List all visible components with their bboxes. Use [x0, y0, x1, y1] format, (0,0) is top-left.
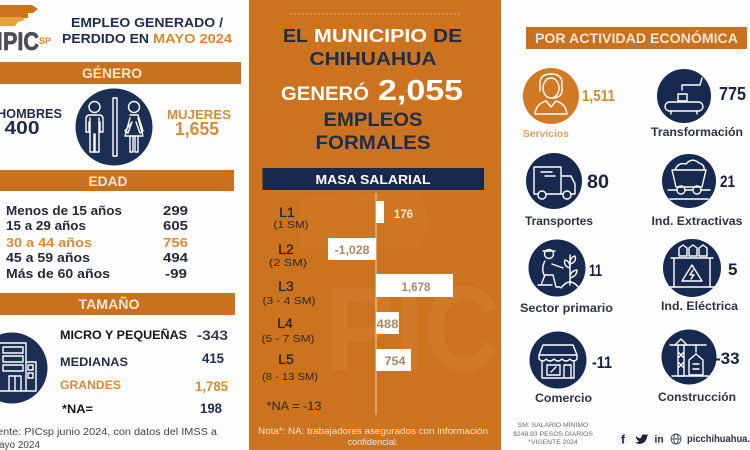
title: EMPLEO GENERADO / [71, 15, 223, 30]
heading: género: GÉNERO [82, 66, 142, 81]
bar L1 [274, 201, 413, 231]
bar L5 [262, 349, 411, 383]
panel: left summary [0, 5, 241, 450]
headline: EMPLEOS [324, 110, 422, 131]
activity: transformación: 775 [719, 84, 746, 104]
table: edad: 15 a 29 años [6, 218, 86, 233]
bar L4: 488 [376, 317, 399, 331]
heading: masa salarial [262, 168, 484, 190]
bar L4: (5 - 7 SM) [262, 333, 314, 345]
table: edad: -99 [165, 266, 187, 281]
heading: tamaño: TAMAÑO [78, 297, 140, 312]
logo [0, 5, 51, 56]
activity: ind. extractivas: Ind. Extractivas [652, 214, 743, 228]
source note [0, 427, 217, 450]
watermark logo [300, 192, 500, 396]
heading: por actividad económica: POR ACTIVIDAD ECONÓMICA [535, 31, 738, 46]
bar L3: 1,678 [402, 280, 431, 294]
headline: 2,055 [378, 75, 463, 107]
activity: servicios: 1,511 [582, 88, 615, 105]
table: tamaño: -343 [197, 327, 228, 343]
table: edad: 756 [163, 235, 188, 250]
source note: ente: PICsp junio 2024, con datos del IMSS a [0, 427, 217, 438]
bar L5: L5 [278, 351, 294, 367]
heading: masa salarial: MASA SALARIAL [316, 172, 431, 187]
title [62, 15, 233, 46]
heading: género [0, 62, 241, 84]
activity: sector primario: Sector primario [520, 301, 613, 315]
title: PERDIDO EN [62, 31, 149, 46]
activity: transformación: Transformación [651, 125, 743, 139]
table: tamaño: GRANDES [60, 378, 121, 392]
activity: ind. extractivas [652, 154, 743, 228]
activity: comercio: Comercio [535, 391, 592, 405]
bar L2 [269, 238, 376, 269]
activity: comercio [530, 332, 612, 405]
table: edad: 605 [163, 218, 188, 233]
social links [616, 432, 750, 446]
mujeres stat: MUJERES [167, 108, 231, 122]
watermark logo: PIC [325, 262, 500, 396]
bar L5: (8 - 13 SM) [262, 371, 318, 383]
table: edad: Menos de 15 años [6, 203, 122, 218]
activity: ind. eléctrica: Ind. Eléctrica [661, 299, 738, 313]
table: edad: 30 a 44 años [6, 235, 92, 250]
activity: construcción: Construcción [658, 390, 736, 404]
activity: sector primario: 11 [589, 261, 602, 280]
headline: MUNICIPIO [314, 25, 427, 46]
minimum wage note: *VIGENTE 2024 [528, 439, 578, 446]
bar L1: (1 SM) [274, 219, 308, 231]
bar L1: L1 [279, 204, 295, 220]
table: tamaño: *NA= [62, 402, 93, 416]
table: tamaño: 1,785 [195, 378, 228, 394]
table: edad: 299 [163, 203, 188, 218]
activity: construcción: -33 [715, 349, 740, 368]
headline: FORMALES [316, 133, 430, 154]
bar L5: 754 [384, 354, 406, 368]
bar L2: -1,028 [334, 243, 370, 257]
hombres stat [0, 107, 62, 138]
bar L4: L4 [277, 315, 293, 331]
mujeres stat: 1,655 [175, 119, 219, 139]
minimum wage note: SM: SALARIO MÍNIMO [518, 420, 588, 429]
activity: servicios [523, 68, 615, 140]
bar L3: L3 [278, 278, 294, 294]
activity: servicios: Servicios [523, 128, 569, 140]
heading: tamaño [0, 293, 235, 315]
activity: transportes: Transportes [525, 214, 593, 228]
footnote: Nota*: NA: trabajadores asegurados con información [258, 426, 488, 436]
activity: construcción [658, 330, 740, 404]
activity: comercio: -11 [592, 353, 612, 372]
activity: ind. eléctrica [661, 239, 738, 313]
activity: ind. extractivas: 21 [720, 172, 735, 191]
table: edad: 45 a 59 años [6, 250, 90, 265]
bar chart: masa salarial [262, 193, 453, 415]
title: MAYO 2024 [153, 31, 233, 46]
icon: restroom figures [76, 88, 152, 166]
bar L4 [262, 312, 399, 345]
bar L2: L2 [278, 241, 294, 257]
table: edad: 494 [163, 250, 189, 265]
activity: sector primario [520, 240, 613, 315]
logo: SP [39, 36, 51, 46]
activity: ind. eléctrica: 5 [728, 260, 737, 279]
bar L2: (2 SM) [269, 257, 307, 269]
social links: in [655, 434, 663, 446]
heading: edad [0, 170, 234, 191]
table: edad [6, 203, 189, 281]
table: tamaño: MEDIANAS [60, 355, 128, 369]
table: edad: Más de 60 años [6, 266, 110, 281]
minimum wage note: $248.93 PESOS DIARIOS [513, 431, 593, 438]
headline: DE [433, 25, 462, 46]
activity: transformación [651, 69, 746, 139]
icon: building [0, 332, 48, 404]
bar L3 [262, 274, 453, 307]
headline: CHIHUAHUA [310, 48, 436, 69]
heading: por actividad económica [526, 27, 747, 49]
table: tamaño: MICRO Y PEQUEÑAS [60, 327, 187, 342]
activity: transportes [525, 153, 609, 228]
NA value: *NA = -13 [266, 399, 322, 413]
table: tamaño: 415 [202, 350, 224, 366]
heading: edad: EDAD [88, 174, 128, 189]
footnote: confidencial. [347, 437, 399, 447]
panel: central orange [249, 0, 501, 450]
minimum wage note [513, 420, 593, 446]
footnote [258, 426, 488, 447]
headline: EL [283, 25, 308, 46]
mujeres stat [167, 108, 231, 139]
bar L1: 176 [394, 207, 413, 221]
activity: transportes: 80 [587, 172, 609, 193]
headline [281, 25, 463, 154]
bar L3: (3 - 4 SM) [262, 295, 316, 307]
logo: PIC [3, 28, 39, 56]
headline: GENERÓ [281, 83, 369, 105]
table: tamaño [60, 327, 228, 416]
table: tamaño: 198 [200, 400, 222, 416]
panel: right activities [513, 27, 750, 446]
hombres stat: 400 [4, 117, 40, 138]
social links: f [621, 432, 626, 446]
